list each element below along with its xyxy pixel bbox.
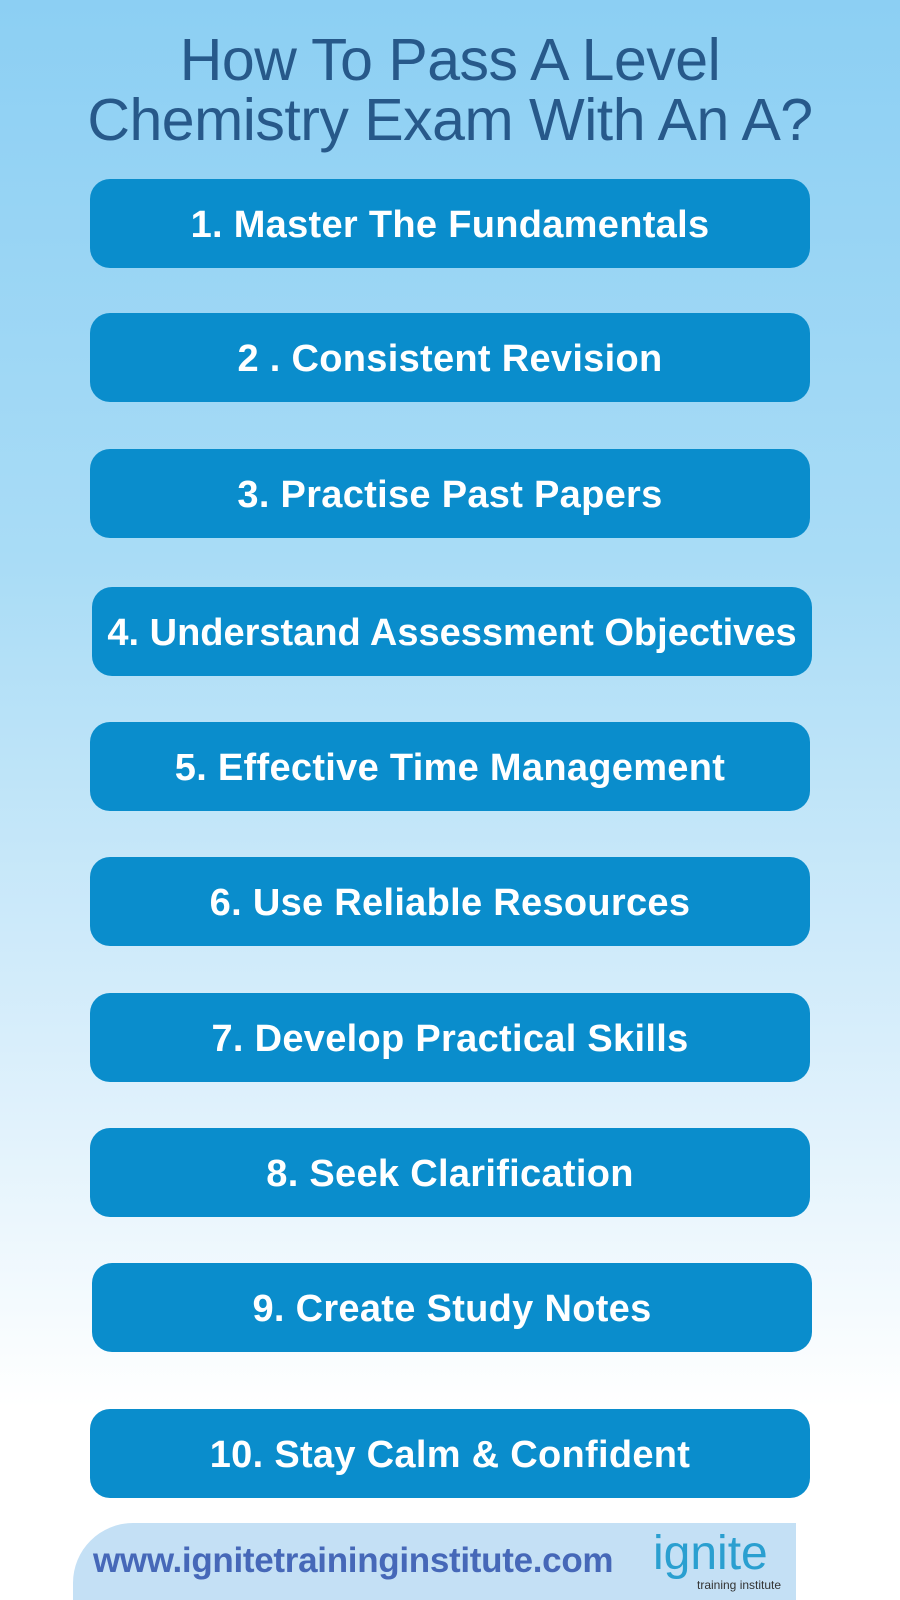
step 1: 1. Master The Fundamentals bbox=[191, 204, 709, 246]
step 5: 5. Effective Time Management bbox=[175, 746, 725, 788]
step 8 bbox=[90, 1128, 810, 1217]
step 4 bbox=[92, 587, 812, 676]
step 2 bbox=[90, 313, 810, 402]
step 8: 8. Seek Clarification bbox=[266, 1152, 634, 1194]
step 9 bbox=[92, 1263, 812, 1352]
step 3: 3. Practise Past Papers bbox=[237, 474, 663, 516]
step 5 bbox=[90, 722, 810, 811]
step 1 bbox=[90, 179, 810, 268]
step 6 bbox=[90, 857, 810, 946]
step 3 bbox=[90, 449, 810, 538]
step 2: 2 . Consistent Revision bbox=[238, 338, 662, 380]
title bbox=[87, 27, 813, 153]
step 4: 4. Understand Assessment Objectives bbox=[107, 612, 797, 654]
title: How To Pass A Level bbox=[180, 27, 720, 93]
title: Chemistry Exam With An A? bbox=[87, 87, 813, 153]
logo: training institute bbox=[697, 1578, 781, 1592]
step 6: 6. Use Reliable Resources bbox=[210, 882, 690, 924]
website url: www.ignitetraininginstitute.com bbox=[93, 1541, 613, 1580]
step 7 bbox=[90, 993, 810, 1082]
step 10 bbox=[90, 1409, 810, 1498]
step 7: 7. Develop Practical Skills bbox=[211, 1018, 688, 1060]
logo: ignite bbox=[653, 1527, 768, 1580]
step 10: 10. Stay Calm & Confident bbox=[210, 1434, 690, 1476]
footer bbox=[73, 1523, 796, 1600]
step 9: 9. Create Study Notes bbox=[252, 1288, 652, 1330]
